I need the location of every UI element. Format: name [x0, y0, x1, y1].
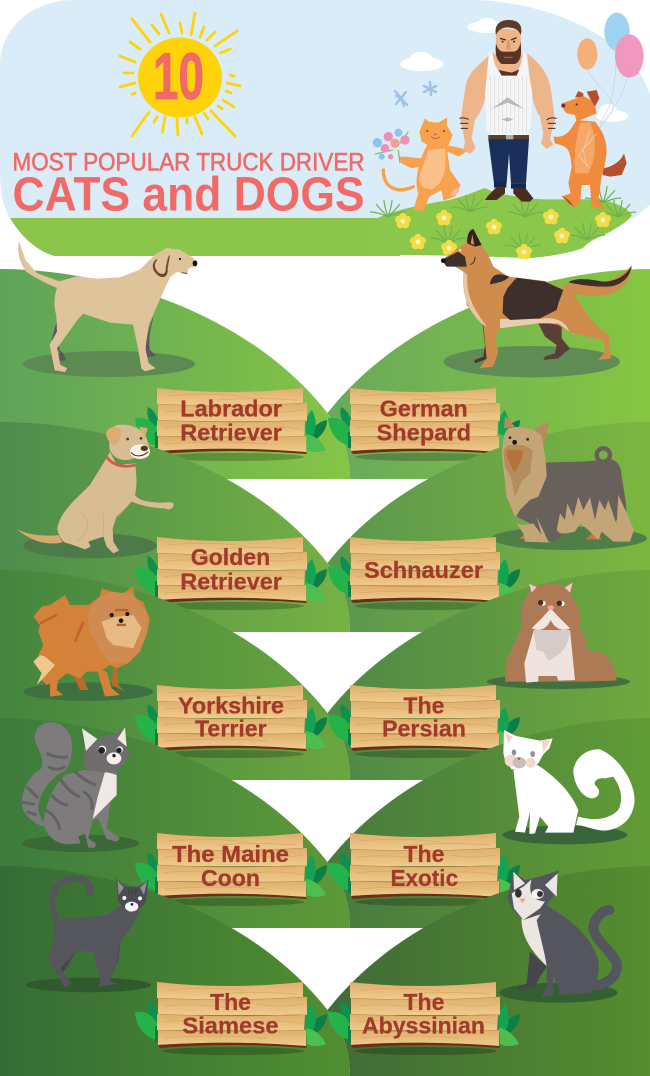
- sign: The Maine Coon: The Maine: [172, 841, 289, 867]
- cat: persian: [487, 582, 630, 689]
- sign: The Persian: [328, 685, 520, 758]
- sign: The Abyssinian: [328, 982, 520, 1055]
- sign: Yorkshire Terrier: [135, 685, 327, 758]
- sign: Golden Retriever: [135, 537, 327, 610]
- dog: german shepherd: [441, 229, 632, 377]
- sign: The Siamese: Siamese: [182, 1012, 279, 1038]
- clouds: [400, 18, 628, 122]
- sign: The Siamese: The: [210, 989, 251, 1015]
- title: [12, 148, 364, 222]
- sign: Labrador Retriever: Retriever: [180, 420, 282, 446]
- sign: The Exotic: Exotic: [390, 865, 458, 891]
- sign: Labrador Retriever: Labrador: [180, 396, 282, 422]
- tier 5: arrow and hills: [0, 866, 650, 1076]
- sign: The Abyssinian: Abyssinian: [362, 1012, 485, 1038]
- tier 4: arrow and hills: [0, 718, 650, 928]
- sign: The Abyssinian: The: [403, 989, 444, 1015]
- sign: The Exotic: The: [403, 841, 444, 867]
- orange dog: [553, 90, 627, 209]
- dog: pomeranian: [23, 587, 153, 701]
- tier 1 background: hills: [0, 269, 650, 479]
- sign: Golden Retriever: Golden: [191, 544, 270, 570]
- title: MOST POPULAR TRUCK DRIVER: [12, 148, 364, 176]
- dog: labrador retriever: [19, 242, 197, 377]
- sign: Golden Retriever: Retriever: [180, 569, 282, 595]
- sign: The Maine Coon: Coon: [201, 865, 260, 891]
- sign: The Persian: The: [403, 692, 444, 718]
- tier 2: arrow and hills: [0, 422, 650, 632]
- number ten: 10: [153, 39, 204, 113]
- sign: Yorkshire Terrier: Yorkshire: [178, 692, 284, 718]
- sign: Schnauzer: [328, 537, 520, 610]
- cat: dark gray: [26, 878, 151, 992]
- sign: The Persian: Persian: [382, 716, 466, 742]
- sign: Schnauzer: Schnauzer: [364, 557, 483, 583]
- header panel: sky and grass: [0, 0, 650, 256]
- sign: Yorkshire Terrier: Terrier: [195, 716, 267, 742]
- grassy island: [370, 186, 636, 259]
- sign: German Shepard: Shepard: [376, 420, 471, 446]
- dog: yorkshire terrier: [492, 416, 647, 550]
- sign: The Siamese: [135, 982, 327, 1055]
- orange cat with bouquet: [373, 117, 467, 211]
- sign: Labrador Retriever: [135, 388, 327, 461]
- dog: golden retriever: [17, 425, 174, 558]
- balloons: [577, 13, 644, 133]
- sign: German Shepard: [328, 388, 520, 461]
- tier 3: arrow and hills: [0, 570, 650, 780]
- sign: The Maine Coon: [135, 833, 327, 906]
- cat: white: [503, 730, 635, 844]
- sign: The Exotic: [328, 833, 520, 906]
- sign: German Shepard: German: [380, 396, 468, 422]
- icon: sun: [120, 13, 240, 136]
- cat: black and white: [499, 871, 617, 1003]
- title: CATS and DOGS: [12, 168, 364, 222]
- dragonflies: [395, 82, 436, 106]
- cat: gray tabby: [22, 722, 139, 852]
- man: [459, 20, 557, 202]
